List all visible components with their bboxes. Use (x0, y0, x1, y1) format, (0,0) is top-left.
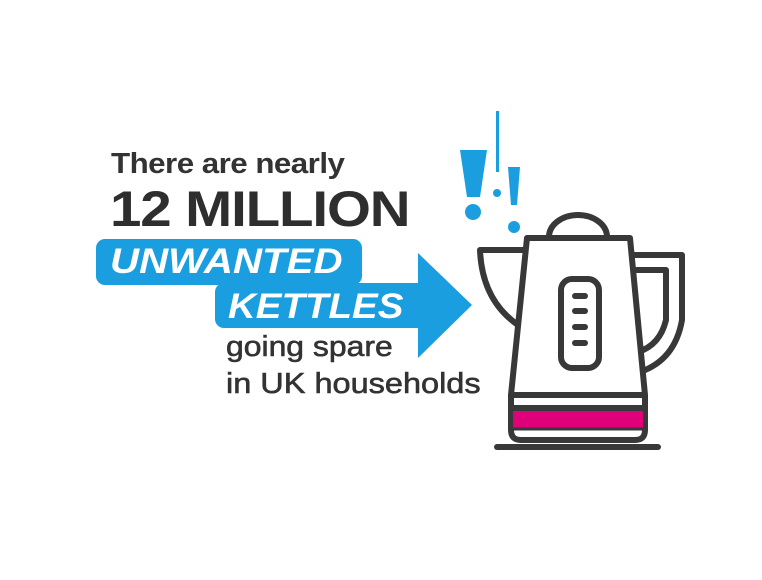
heading line 1: There are nearly (111, 148, 344, 180)
blue arrow with kettles pill (215, 253, 472, 358)
icon: kettle (460, 111, 685, 450)
text: unwanted: UNWANTED (110, 242, 343, 281)
text: going spare: going spare (226, 331, 393, 363)
blue pill: unwanted (96, 239, 362, 285)
icon: exclamation marks (460, 111, 520, 233)
heading big number: 12 MILLION (110, 181, 409, 237)
text: kettles: KETTLES (228, 287, 403, 326)
text: in UK households: in UK households (226, 368, 481, 400)
